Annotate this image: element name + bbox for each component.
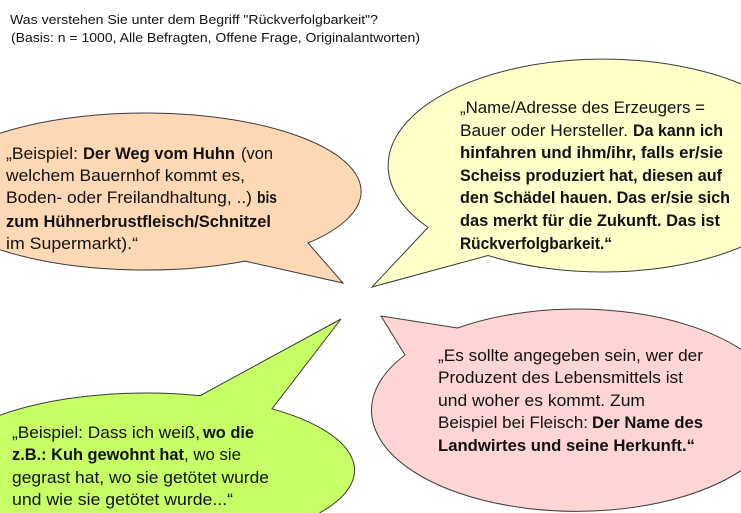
bubble shape: green xyxy=(0,319,355,513)
text: green bubble quote xyxy=(12,424,269,509)
heading: survey question xyxy=(10,12,420,45)
text: yellow bubble quote xyxy=(460,99,730,253)
text: yellow bubble quote: Scheiss produziert hat, diesen auf xyxy=(460,167,722,185)
heading: survey question: (Basis: n = 1000, Alle Befragten, Offene Frage, Originalantworten) xyxy=(11,30,420,45)
bubble shape: peach xyxy=(0,113,361,283)
panel: green speech bubble xyxy=(0,319,355,513)
text: pink bubble quote: Produzent des Lebensmittels ist xyxy=(438,369,683,387)
text: peach bubble quote: (von xyxy=(241,145,273,163)
text: peach bubble quote: zum Hühnerbrustfleisch/Schnitzel xyxy=(6,213,271,231)
text: peach bubble quote xyxy=(5,145,277,253)
text: yellow bubble quote: hinfahren und ihm/ihr, falls er/sie xyxy=(460,144,723,162)
text: green bubble quote: z.B.: Kuh gewohnt hat xyxy=(12,446,184,464)
text: peach bubble quote: welchem Bauernhof kommt es, xyxy=(5,167,245,185)
text: yellow bubble quote: Rückverfolgbarkeit.“ xyxy=(460,235,612,253)
text: yellow bubble quote: den Schädel hauen. Das er/sie sich xyxy=(460,189,730,207)
panel: pink speech bubble xyxy=(372,309,741,511)
text: pink bubble quote xyxy=(438,347,704,455)
text: green bubble quote: und wie sie getötet wurde...“ xyxy=(12,491,233,509)
text: yellow bubble quote: Da kann ich xyxy=(633,122,723,140)
text: green bubble quote: wo die xyxy=(202,424,254,442)
text: yellow bubble quote: Bauer oder Hersteller. xyxy=(460,122,628,140)
text: pink bubble quote: Der Name des xyxy=(592,414,703,432)
text: peach bubble quote: Boden- oder Freilandhaltung, ..) xyxy=(6,189,252,207)
text: green bubble quote: „Beispiel: Dass ich weiß, xyxy=(12,424,200,442)
heading: survey question: Was verstehen Sie unter dem Begriff "Rückverfolgbarkeit"? xyxy=(10,12,378,27)
bubble shape: pink xyxy=(372,309,741,511)
text: peach bubble quote: „Beispiel: xyxy=(6,145,78,163)
text: pink bubble quote: „Es sollte angegeben sein, wer der xyxy=(438,347,704,365)
text: peach bubble quote: Der Weg vom Huhn xyxy=(83,145,235,163)
text: peach bubble quote: im Supermarkt).“ xyxy=(6,235,138,253)
text: pink bubble quote: Beispiel bei Fleisch: xyxy=(438,414,588,432)
text: green bubble quote: , wo sie xyxy=(184,446,241,464)
text: pink bubble quote: Landwirtes und seine Herkunft.“ xyxy=(438,437,695,455)
text: yellow bubble quote: „Name/Adresse des Erzeugers = xyxy=(460,99,705,117)
text: green bubble quote: gegrast hat, wo sie getötet wurde xyxy=(12,469,269,487)
text: pink bubble quote: und woher es kommt. Zum xyxy=(438,392,645,410)
panel: yellow speech bubble xyxy=(372,59,741,287)
text: peach bubble quote: bis xyxy=(257,189,277,207)
bubble shape: yellow xyxy=(372,59,741,287)
panel: peach speech bubble xyxy=(0,113,361,283)
text: yellow bubble quote: das merkt für die Zukunft. Das ist xyxy=(460,212,720,230)
